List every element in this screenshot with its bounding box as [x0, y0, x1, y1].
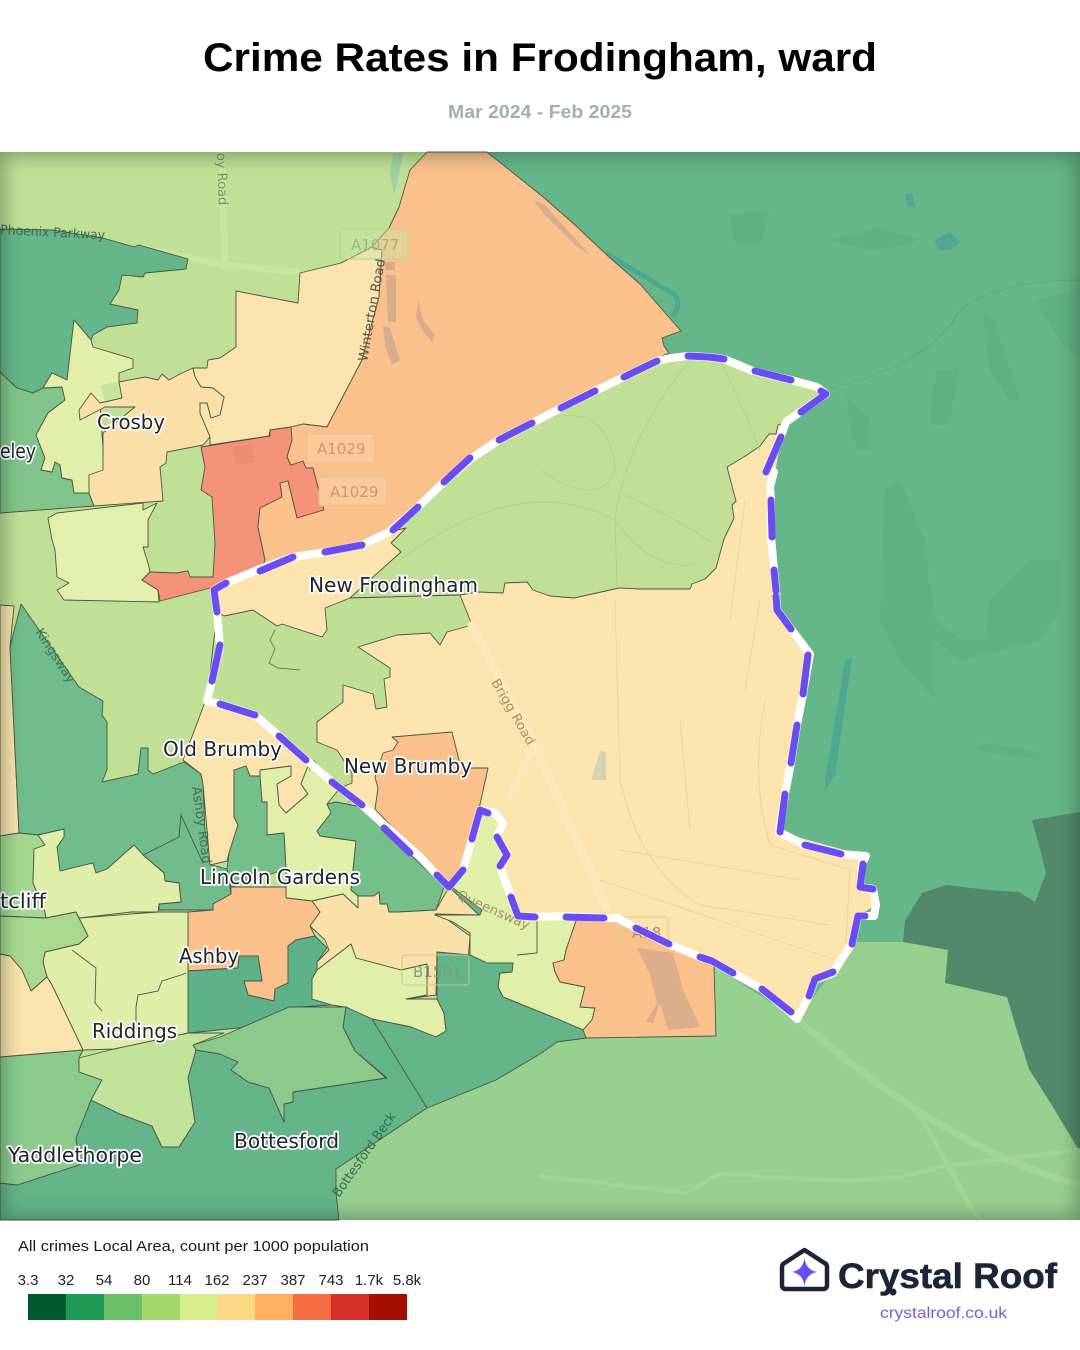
legend title: All crimes Local Area, count per 1000 population	[18, 1238, 369, 1255]
place label: New Brumby: New Brumby	[344, 754, 472, 778]
area: green east of Lincoln Gardens	[317, 802, 444, 912]
ward boundary white casing	[207, 356, 876, 1019]
place label: Yaddlethorpe: Yaddlethorpe	[7, 1143, 142, 1167]
logo wordmark y-key detail	[890, 1288, 896, 1296]
road label: A1077	[340, 229, 408, 259]
place label: Riddings: Riddings	[92, 1019, 177, 1043]
area: yellow middle south	[310, 887, 479, 999]
area: west base light green	[0, 152, 586, 1220]
Brigg Road lighter road stroke	[470, 622, 607, 910]
area: west yellow strip	[0, 605, 19, 836]
lake	[390, 153, 403, 195]
ward area: dark green far east	[903, 812, 1080, 1220]
road label: B1501: B1501	[413, 963, 461, 981]
legend scale values: 237	[242, 1272, 268, 1289]
road label: A1029 upper: A1029	[317, 440, 365, 458]
road name: oy Road: oy Road	[213, 153, 230, 206]
slag heap lines	[400, 360, 760, 588]
road label: A1029 lower: A1029	[330, 483, 378, 501]
industrial patch south east	[637, 948, 700, 1030]
legend scale values: 5.8k	[393, 1272, 422, 1289]
road name: Kingsway: Kingsway	[32, 626, 78, 686]
place label: Old Brumby: Old Brumby	[163, 737, 282, 761]
logo website link: crystalroof.co.uk	[880, 1305, 1008, 1322]
area: New Brumby orange	[375, 732, 488, 887]
area: Frodingham ward yellow	[207, 356, 876, 1019]
area: light green south east	[336, 942, 1080, 1220]
top left faint roads	[60, 152, 300, 390]
subtitle: date range: Mar 2024 - Feb 2025	[448, 102, 632, 122]
place label: tcliff: tcliff	[0, 889, 47, 913]
road name: Bottesford Beck: Bottesford Beck	[330, 1109, 400, 1200]
legend scale values: 114	[168, 1272, 192, 1289]
area: ward south west green	[207, 595, 472, 788]
area: high crime red	[142, 427, 324, 601]
area: Ashby orange	[188, 887, 320, 1001]
area: Ashby south dark green	[188, 936, 332, 1033]
road name: Queensway: Queensway	[454, 888, 532, 934]
area: Old Brumby yellow	[183, 702, 308, 865]
forest texture patches	[730, 210, 1080, 760]
area: ward pale south	[435, 810, 595, 1030]
area: Kingsway green	[10, 604, 231, 910]
water features	[825, 193, 960, 790]
legend scale values: 162	[204, 1272, 230, 1289]
area: west mid green	[0, 372, 94, 513]
area: south dark green band	[0, 952, 586, 1220]
works grey patch	[591, 751, 606, 780]
area: Riddings south light green	[79, 1033, 224, 1147]
area: Crosby yellow east	[193, 247, 382, 445]
logo wordmark: Crystal Roof	[838, 1257, 1057, 1296]
area: south mid green	[193, 1007, 386, 1122]
industrial patches	[383, 200, 590, 365]
area: south east orange	[553, 918, 716, 1038]
south east faint roads	[540, 1019, 1080, 1220]
legend colour ramp	[28, 1294, 407, 1320]
logo icon: house with star	[782, 1250, 827, 1289]
road name: Winterton Road: Winterton Road	[356, 258, 389, 363]
works lines	[600, 500, 850, 960]
place label: Ashby: Ashby	[179, 944, 239, 968]
area: pale west box	[48, 503, 159, 602]
area: orange north	[258, 152, 681, 568]
area: green Lincoln Gardens west	[227, 766, 286, 887]
place label: eley: eley	[0, 439, 36, 463]
road label: A1077: A1077	[351, 236, 399, 254]
area: yellow far south west	[0, 954, 83, 1057]
road label: A1029 upper	[307, 434, 375, 463]
place label: New Frodingham: New Frodingham	[309, 573, 478, 597]
area: pale Westcliff	[33, 829, 181, 918]
road label: A1029 lower	[319, 477, 387, 506]
legend scale values: 54	[96, 1272, 112, 1289]
area: light green west corner	[0, 833, 46, 918]
area: pale Lincoln south	[312, 944, 446, 1037]
road name: Phoenix Parkway: Phoenix Parkway	[0, 223, 106, 244]
road name: Ashby Road: Ashby Road	[188, 785, 214, 865]
legend scale values: 32	[58, 1272, 74, 1289]
area: pale Lincoln Gardens	[260, 766, 358, 908]
road label: A18: A18	[632, 924, 661, 942]
legend scale values: 743	[318, 1272, 344, 1289]
road name: Queensway upper: Queensway	[304, 757, 360, 806]
legend scale values: 1.7k	[355, 1272, 384, 1289]
place label: Lincoln Gardens: Lincoln Gardens	[200, 865, 360, 889]
area: Yaddlethorpe green	[0, 1050, 102, 1185]
title: Crime Rates in Frodingham, ward	[203, 36, 877, 80]
legend scale values: 80	[134, 1272, 150, 1289]
area: north west green	[0, 229, 188, 393]
area: light green west corner south	[0, 912, 88, 991]
legend scale values: 387	[280, 1272, 306, 1289]
area: ward north light green	[350, 356, 826, 598]
place label: Crosby: Crosby	[97, 410, 165, 434]
legend scale values: 3.3	[18, 1272, 38, 1289]
area: Riddings pale	[43, 912, 188, 1050]
road label: A18	[621, 917, 668, 945]
road name: Brigg Road: Brigg Road	[488, 676, 538, 748]
ward boundary purple dashes	[212, 356, 873, 1012]
area: pale beside Crosby	[36, 320, 133, 493]
legend scale values	[18, 1272, 422, 1289]
choropleth map	[0, 152, 1080, 1220]
place label: Bottesford: Bottesford	[234, 1129, 339, 1153]
area: Crosby yellow central	[79, 368, 224, 506]
road label: B1501	[402, 955, 469, 985]
